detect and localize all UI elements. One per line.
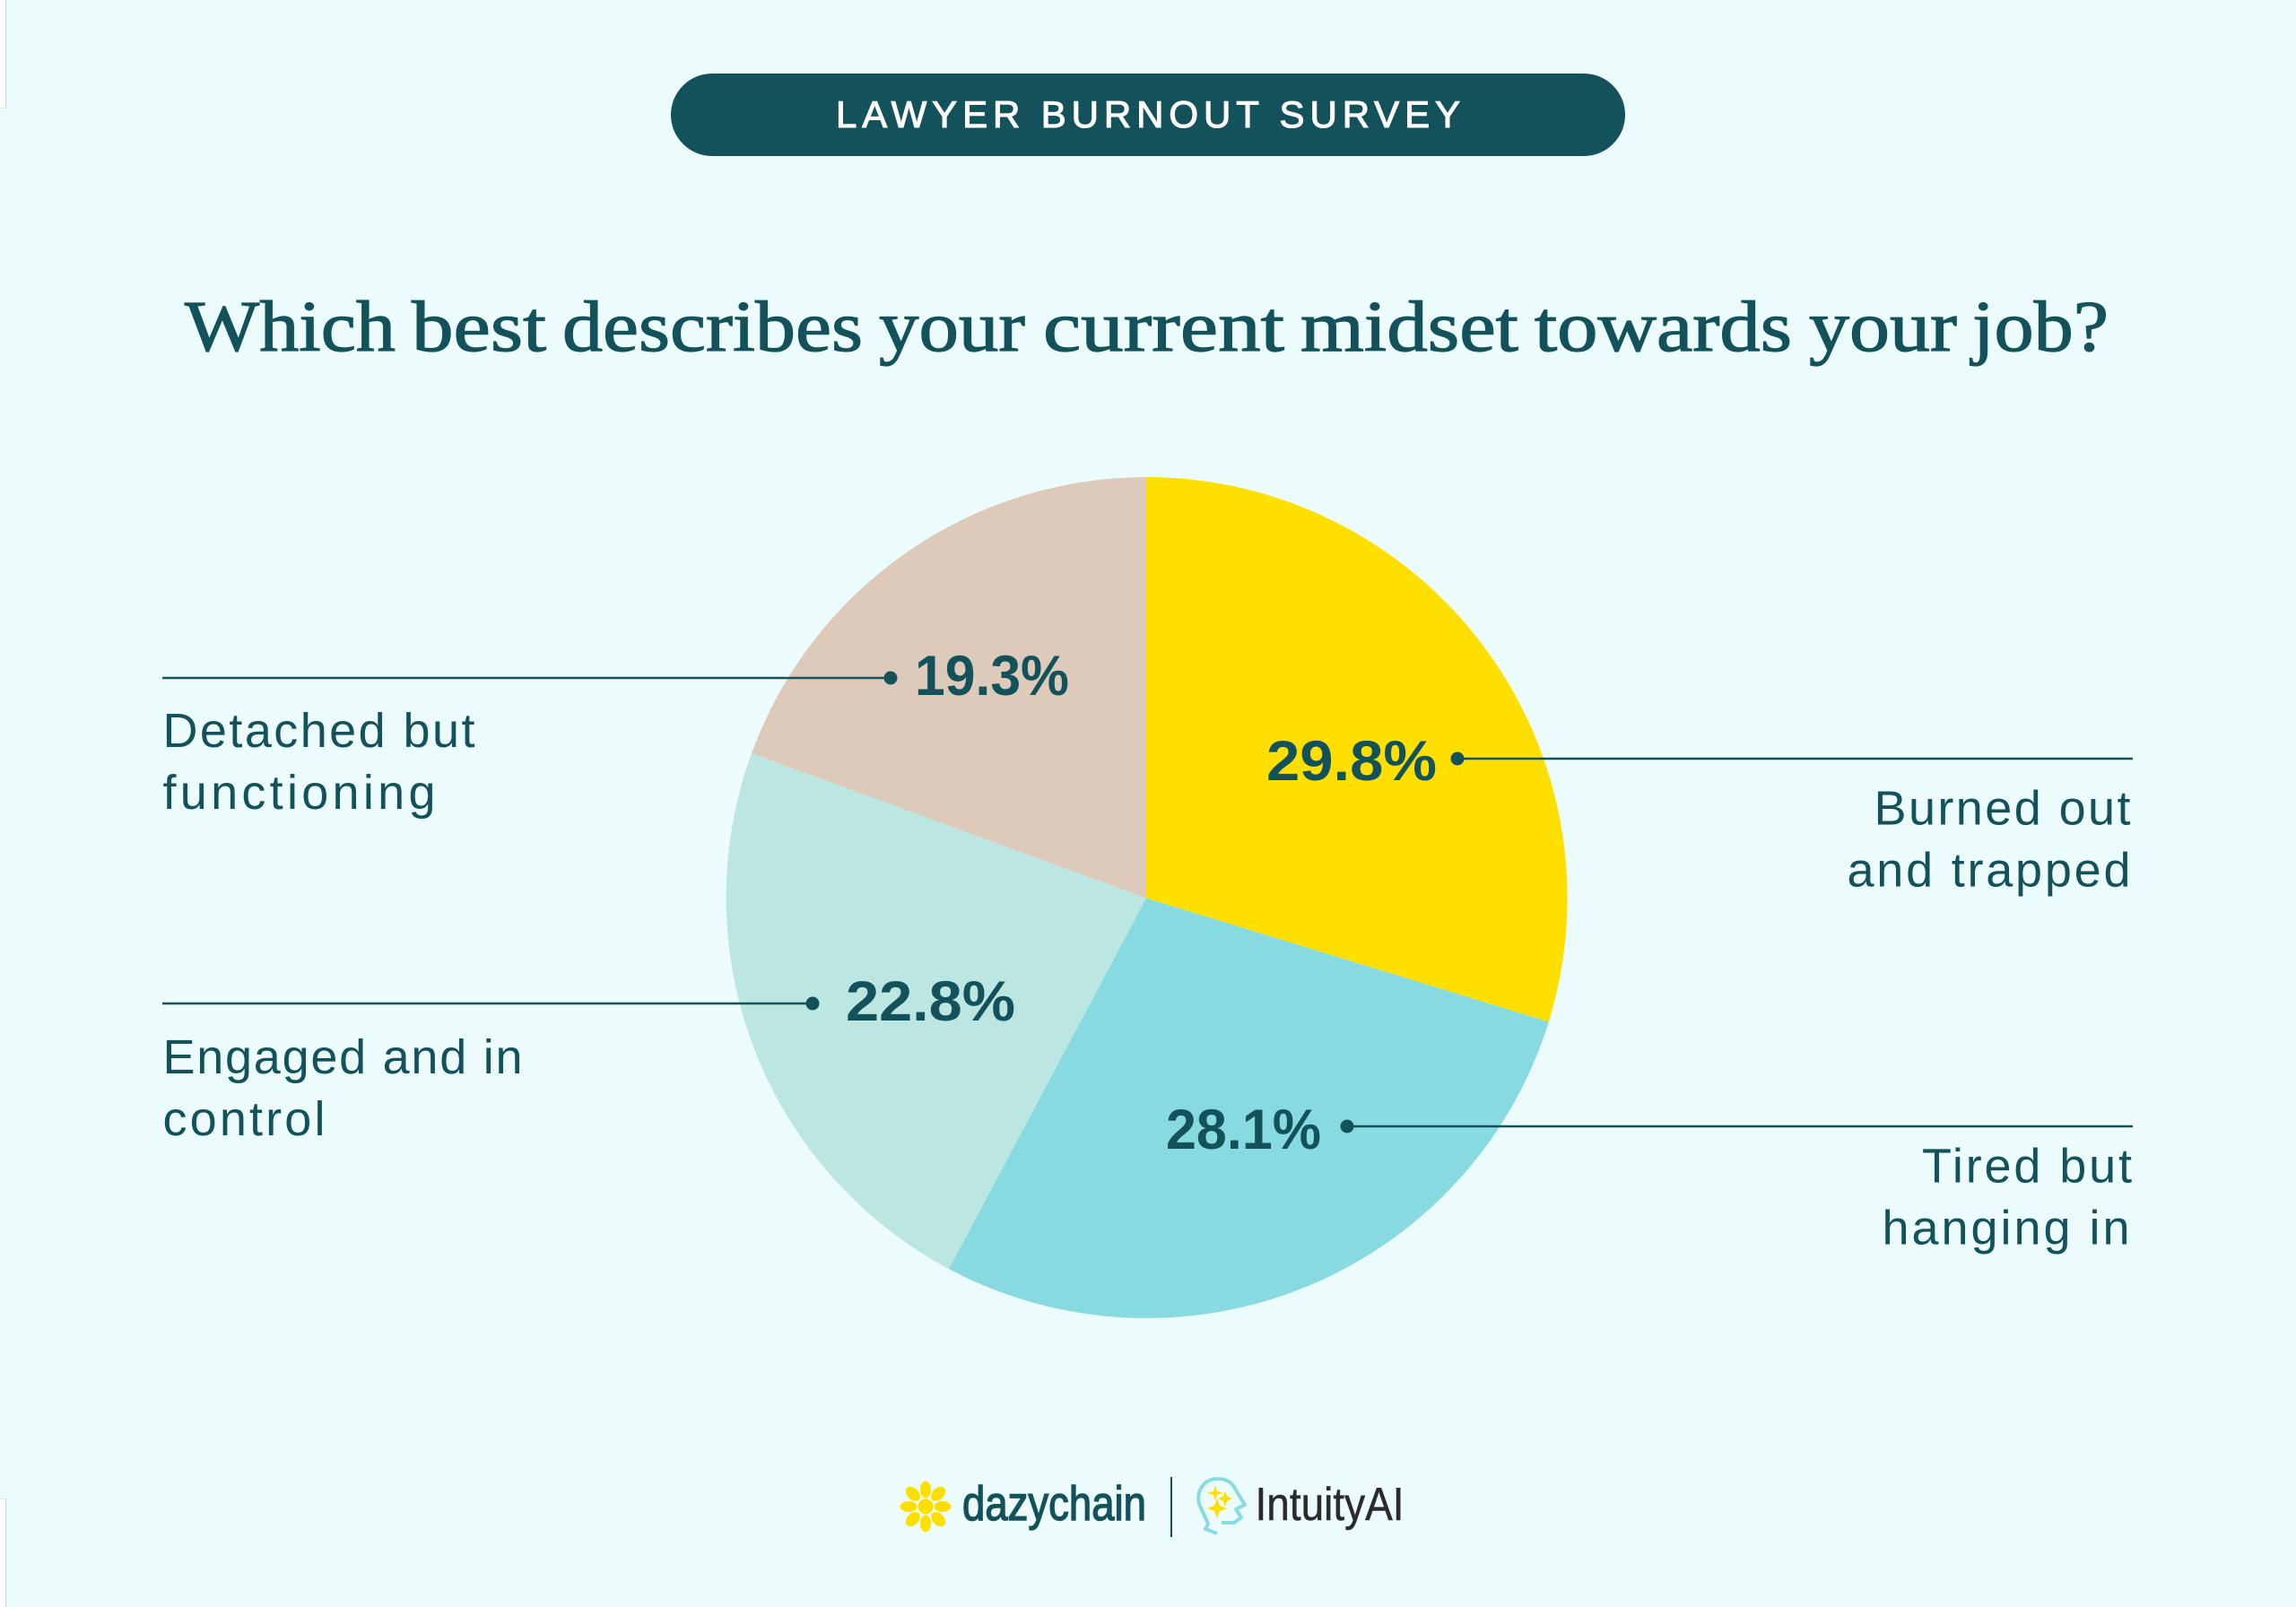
title: job? xyxy=(1970,288,2109,367)
title: your xyxy=(879,288,1025,367)
dazychain wordmark: dazychain xyxy=(962,1477,1146,1531)
IntuityAI wordmark: IntuityAI xyxy=(1256,1479,1405,1531)
callout: engaged and in control: 22.8% xyxy=(846,970,1015,1033)
title: midset xyxy=(1300,288,1518,367)
callout: tired but hanging in xyxy=(1166,1099,2133,1255)
icon: head with sparkles xyxy=(1198,1479,1245,1533)
pie chart xyxy=(726,477,1568,1318)
title: best xyxy=(412,288,546,367)
callout: detached but functioning: 19.3% xyxy=(915,645,1069,708)
title xyxy=(185,288,2109,367)
callout: burned out and trapped xyxy=(1266,730,2133,897)
slice: detached but functioning 19.3% xyxy=(752,477,1146,899)
callout: burned out and trapped: and trapped xyxy=(1848,843,2131,897)
callout: detached but functioning xyxy=(162,645,1069,820)
title: describes xyxy=(562,288,863,367)
callout: engaged and in control xyxy=(162,970,1015,1146)
callout: detached but functioning: functioning xyxy=(163,766,436,820)
footer logos xyxy=(900,1477,1405,1537)
callout: burned out and trapped: 29.8% xyxy=(1266,730,1437,793)
title: current xyxy=(1043,288,1284,367)
icon: dazychain flower xyxy=(900,1481,951,1532)
slice: burned out and trapped 29.8% xyxy=(1146,477,1568,1022)
logo divider xyxy=(1170,1477,1172,1537)
callout: burned out and trapped: Burned out xyxy=(1874,782,2131,836)
title: towards xyxy=(1535,288,1792,367)
callout: tired but hanging in: hanging in xyxy=(1882,1202,2129,1255)
callout: tired but hanging in: Tired but xyxy=(1922,1139,2132,1193)
slice: tired but hanging in 28.1% xyxy=(949,899,1549,1318)
callout: tired but hanging in: 28.1% xyxy=(1166,1099,1321,1161)
title: your xyxy=(1809,288,1957,367)
callout: engaged and in control: Engaged and in xyxy=(163,1030,522,1084)
slice: engaged and in control 22.8% xyxy=(726,753,1146,1269)
callout: detached but functioning: Detached but xyxy=(163,704,475,758)
header pill: LAWYER BURNOUT SURVEY xyxy=(836,93,1460,135)
callout: engaged and in control: control xyxy=(163,1092,325,1146)
title: Which xyxy=(185,288,396,367)
header pill xyxy=(671,74,1625,156)
